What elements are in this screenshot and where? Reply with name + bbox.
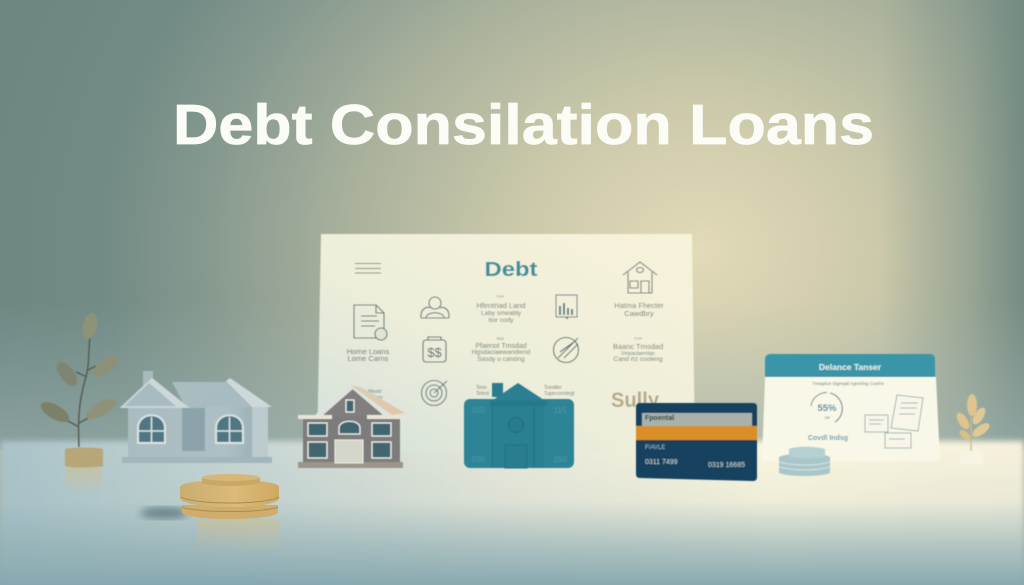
text: home loans: Home Loans bbox=[347, 347, 390, 356]
text: balance middle: Pfaenot Tmsdad bbox=[475, 343, 527, 350]
icon: money bag: $$ bbox=[427, 345, 442, 360]
text: balance right: Baanc Tmsdad bbox=[613, 342, 663, 351]
text: home loans: Lome Carns bbox=[348, 354, 389, 363]
icon: credit card: FIAVLE bbox=[645, 445, 665, 451]
text: balance right: Vmpactaemtan bbox=[621, 351, 655, 357]
icon: grey-blue house bbox=[122, 371, 272, 463]
bank numerals: 115 bbox=[554, 406, 567, 415]
icon: teal bank bbox=[464, 383, 574, 468]
text: column labels row one: TYP bbox=[496, 294, 504, 299]
plant pot right bbox=[960, 451, 983, 464]
icon: menu lines bbox=[355, 264, 381, 273]
text: balance middle bbox=[472, 336, 531, 363]
text: home lender: Cawdbry bbox=[624, 309, 654, 318]
board heading: Debt bbox=[484, 259, 538, 281]
icon: plant left bbox=[38, 312, 122, 468]
text: balance right: TYP bbox=[634, 336, 642, 341]
bank numerals: 100 bbox=[471, 455, 485, 464]
icon: people bbox=[421, 297, 449, 318]
icon: stacked coins bbox=[779, 447, 830, 476]
bank numerals: 150 bbox=[553, 455, 567, 464]
text: home lender: Hatma Fhecter bbox=[614, 301, 664, 310]
text: column labels row one bbox=[476, 294, 526, 324]
icon: target bbox=[422, 380, 447, 406]
panel: balance transfer card: Off bbox=[824, 415, 831, 420]
text: lower middle: Toestler bbox=[544, 385, 562, 391]
text: lower middle: Tenn bbox=[476, 385, 487, 391]
text: column labels row one: Laby smeably bbox=[481, 310, 522, 317]
text: balance right bbox=[613, 336, 663, 363]
bank numerals: 100 bbox=[471, 406, 485, 415]
house door bbox=[335, 440, 363, 463]
text: balance right: Cand rtz cooleng bbox=[613, 356, 663, 363]
plant pot bbox=[65, 448, 103, 468]
panel: debt board bbox=[317, 234, 695, 452]
panel: balance transfer card: 55% bbox=[817, 403, 837, 414]
icon: credit card: 0311 7499 bbox=[645, 459, 678, 466]
panel: balance transfer card bbox=[762, 354, 940, 461]
icon: credit card: Fpoental bbox=[645, 415, 674, 422]
house windows bbox=[308, 400, 391, 458]
icon: gold coins bbox=[140, 474, 279, 519]
icon: credit card bbox=[636, 403, 757, 481]
icon: money bag bbox=[423, 337, 446, 362]
title: Debt Consilation Loans bbox=[173, 93, 874, 157]
text: column labels row one: bor cody bbox=[489, 317, 514, 324]
text: column labels row one: Hfentriad Land bbox=[476, 301, 526, 310]
background wall bbox=[0, 0, 1024, 450]
text: lower middle bbox=[368, 385, 575, 401]
icon: bar chart bbox=[556, 295, 577, 319]
text: lower middle: Telest bbox=[476, 391, 490, 397]
card heading: Delance Tanser bbox=[819, 362, 882, 372]
floor bbox=[0, 441, 1024, 585]
text: lower middle: Tupeconntegt bbox=[544, 391, 575, 397]
text: balance middle: Hgsdaciaewandiend bbox=[472, 349, 531, 356]
text: sully: Sully bbox=[611, 389, 659, 412]
panel: balance transfer card: Tneaptue Signrgal Agreslisg Cueins bbox=[812, 381, 885, 386]
text: balance middle: TAS bbox=[496, 336, 504, 341]
bank numerals bbox=[471, 406, 567, 464]
windows bbox=[138, 415, 165, 443]
icon: plant right bbox=[954, 394, 992, 464]
icon: pen circle bbox=[554, 338, 578, 362]
text: lower middle: Mixed bbox=[368, 389, 382, 395]
gauge bbox=[811, 392, 842, 422]
text: lower middle: Tyon bbox=[372, 395, 383, 401]
icon: document bbox=[354, 305, 387, 340]
text: home loans bbox=[347, 347, 390, 363]
icon: credit card: 0319 16685 bbox=[708, 462, 745, 469]
panel: balance transfer card: Covdl Indsg bbox=[808, 435, 848, 442]
text: home lender bbox=[614, 301, 664, 318]
icon: house outline bbox=[623, 262, 657, 293]
text: balance middle: Sasdy u calsting bbox=[477, 356, 525, 363]
documents bbox=[865, 395, 923, 448]
icon: brown house bbox=[298, 385, 407, 468]
